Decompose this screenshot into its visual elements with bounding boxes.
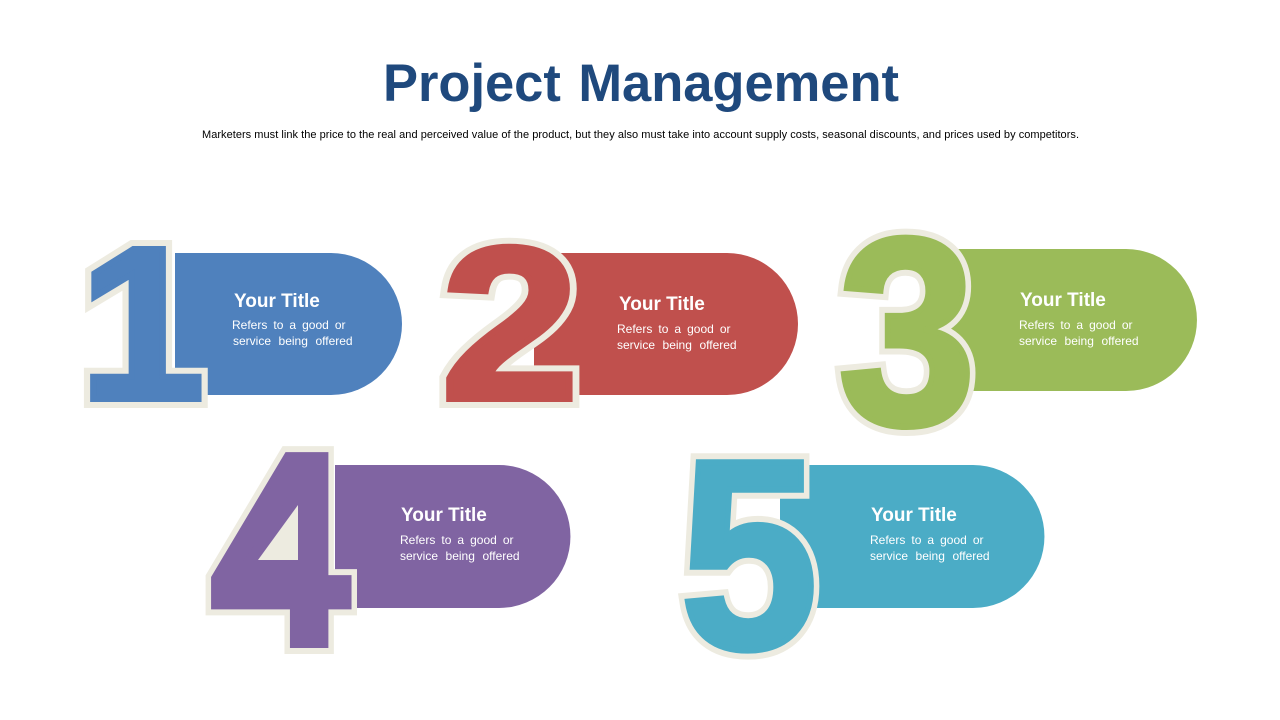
step 4 — [210, 396, 570, 705]
step 2 — [441, 201, 798, 446]
text 4 — [400, 505, 520, 563]
pill 5 — [780, 465, 1044, 608]
pill 4 — [335, 465, 570, 608]
pill 2 — [534, 253, 798, 395]
text 1: Refers to a good or — [232, 318, 346, 332]
text 1: Your Title — [234, 291, 320, 312]
icon: numeral 4 counter — [258, 505, 298, 560]
text 1 — [232, 291, 353, 348]
text 4: service being offered — [400, 549, 520, 563]
title: Project Management — [383, 54, 899, 113]
numeral 4 counter backing — [228, 470, 308, 582]
numeral 4: 4 — [210, 396, 352, 705]
text 3: Your Title — [1020, 290, 1106, 311]
text 4: Your Title — [401, 505, 487, 526]
text 5: Your Title — [871, 505, 957, 526]
numeral 2: 2 — [441, 201, 579, 446]
numeral 5: 5 — [680, 403, 818, 705]
text 4: Refers to a good or — [400, 533, 514, 547]
numeral 1: 1 — [79, 203, 205, 446]
numeral 3: 3 — [838, 183, 976, 481]
text 2: Your Title — [619, 294, 705, 315]
pill 3 — [950, 249, 1197, 391]
text 2 — [617, 294, 737, 352]
text 2: Refers to a good or — [617, 322, 731, 336]
text 3 — [1019, 290, 1139, 348]
subtitle: Marketers must link the price to the real and perceived value of the product, but they also must take into account supply costs, seasonal discounts, and prices used by competitors. — [202, 129, 1079, 141]
numeral 3: 3 — [838, 183, 976, 481]
text 5 — [870, 505, 990, 563]
numeral 2: 2 — [441, 201, 579, 446]
text 1: service being offered — [233, 334, 353, 348]
step 1 — [79, 203, 402, 446]
text 2: service being offered — [617, 338, 737, 352]
numeral 4: 4 — [210, 396, 352, 705]
text 5: Refers to a good or — [870, 533, 984, 547]
text 3: service being offered — [1019, 334, 1139, 348]
numeral 5: 5 — [680, 403, 818, 705]
numeral 1: 1 — [79, 203, 205, 446]
step 5 — [680, 403, 1044, 705]
text 3: Refers to a good or — [1019, 318, 1133, 332]
step 3 — [838, 183, 1197, 481]
pill 1 — [175, 253, 402, 395]
text 5: service being offered — [870, 549, 990, 563]
